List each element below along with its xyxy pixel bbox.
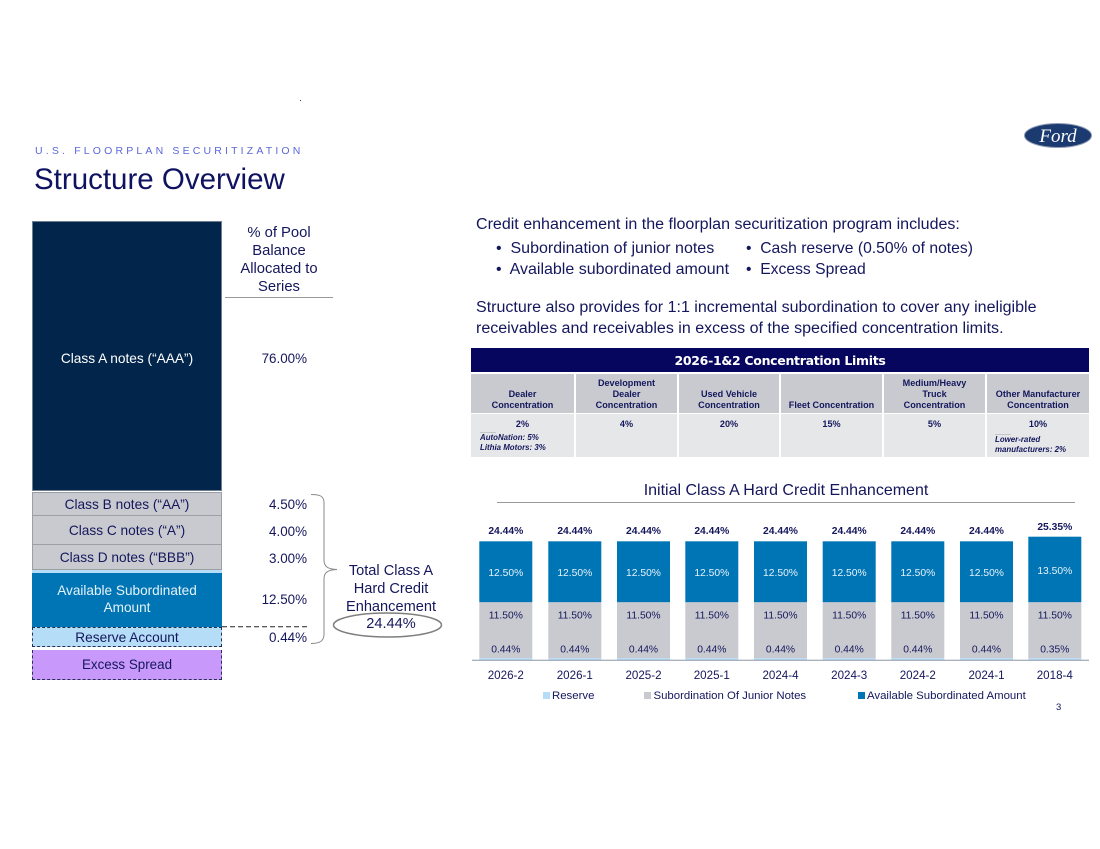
- intro sentence: Credit enhancement in the floorplan securitization program includes:: [476, 215, 960, 233]
- bar 2018-4: 0.35%: [1040, 644, 1069, 656]
- structure paragraph: [476, 298, 1037, 337]
- column: Dealer: Dealer: [509, 389, 536, 399]
- bar 2018-4: 25.35%: [1037, 522, 1072, 533]
- column: Development Dealer: Concentration: [596, 400, 657, 410]
- bar 2024-3: 12.50%: [832, 568, 867, 579]
- bar 2024-1: 24.44%: [969, 526, 1004, 537]
- Class D notes block: Class D notes (“BBB”): [60, 550, 194, 565]
- bar 2026-1: [548, 526, 601, 682]
- bar 2024-4: 2024-4: [762, 669, 799, 682]
- bar 2024-2: 2024-2: [900, 669, 936, 682]
- total credit enhancement label: 24.44%: [366, 616, 416, 632]
- column: Used Vehicle: Concentration: [698, 400, 760, 410]
- bar 2025-2: 2025-2: [625, 669, 662, 682]
- Available Subordinated Amount block: Amount: [104, 600, 150, 615]
- icon: Ford logo: Ford: [1038, 126, 1077, 147]
- column: Used Vehicle: 20%: [720, 419, 738, 429]
- manufacturer footnote: [995, 434, 1066, 454]
- Excess Spread block: Excess Spread: [82, 657, 172, 672]
- bar 2025-1: 24.44%: [694, 526, 729, 537]
- bar 2026-1: 12.50%: [557, 568, 592, 579]
- chart legend: Reserve: [552, 690, 594, 702]
- percent column heading: [240, 225, 318, 295]
- column: Medium/Heavy Truck: Concentration: [904, 400, 965, 410]
- column: Dealer: [471, 374, 574, 457]
- percent values: [262, 351, 307, 645]
- eyebrow heading: U.S. FLOORPLAN SECURITIZATION: [35, 145, 304, 157]
- column: Development Dealer: 4%: [620, 419, 633, 429]
- bar 2024-4: 12.50%: [763, 568, 798, 579]
- percent column heading: % of Pool: [247, 225, 311, 241]
- bar 2024-4: 24.44%: [763, 526, 798, 537]
- bar 2025-2: 24.44%: [626, 526, 661, 537]
- dealer footnote: Lithia Motors: 3%: [480, 443, 546, 452]
- Class C notes block: [32, 516, 222, 545]
- bar 2018-4: [1028, 522, 1081, 682]
- column: Used Vehicle: [679, 374, 779, 457]
- bullet: cash reserve: • Cash reserve (0.50% of notes): [746, 240, 973, 257]
- bar 2026-2: 12.50%: [488, 568, 523, 579]
- structure paragraph: Structure also provides for 1:1 incremental subordination to cover any ineligible: [476, 298, 1037, 316]
- column: Other Manufacturer: Concentration: [1007, 400, 1069, 410]
- bar 2025-2: 11.50%: [626, 610, 661, 622]
- bullet: excess spread: • Excess Spread: [746, 261, 866, 278]
- column: Other Manufacturer: Other Manufacturer: [996, 389, 1080, 399]
- bar 2026-2: 11.50%: [489, 610, 523, 622]
- bar 2025-1: 2025-1: [694, 669, 730, 682]
- manufacturer footnote: manufacturers: 2%: [995, 445, 1066, 454]
- Class A notes block: Class A notes (“AAA”): [61, 351, 193, 366]
- percent column heading: Series: [258, 279, 300, 295]
- column: Medium/Heavy Truck: 5%: [928, 419, 941, 429]
- bar 2024-3: 0.44%: [835, 644, 864, 656]
- bar 2025-2: 12.50%: [626, 568, 661, 579]
- bar 2025-1: 12.50%: [694, 568, 729, 579]
- column: Medium/Heavy Truck: [884, 374, 985, 457]
- total credit enhancement label: [346, 563, 436, 632]
- bar 2024-4: 11.50%: [763, 610, 798, 622]
- bar 2026-2: 2026-2: [488, 669, 524, 682]
- bar 2018-4: 13.50%: [1037, 566, 1072, 577]
- bar 2026-2: 0.44%: [491, 644, 520, 656]
- bar 2024-2: 11.50%: [901, 610, 935, 622]
- bar 2025-1: [685, 526, 738, 682]
- bar 2024-1: 0.44%: [972, 644, 1001, 656]
- bar 2024-3: 2024-3: [831, 669, 867, 682]
- percent column rule: [225, 297, 333, 298]
- Class A percent: 76.00%: [262, 351, 307, 366]
- dealer footnote: AutoNation: 5%: [480, 433, 539, 442]
- column: Used Vehicle: Used Vehicle: [701, 389, 757, 399]
- bar 2024-2: 12.50%: [900, 568, 935, 579]
- Reserve percent: 0.44%: [269, 630, 307, 645]
- credit enhancement text block: [476, 215, 1037, 337]
- total credit enhancement label: Enhancement: [346, 599, 436, 615]
- Class B percent: 4.50%: [269, 497, 307, 512]
- bar 2024-3: [823, 526, 876, 682]
- Reserve Account block: Reserve Account: [75, 630, 179, 645]
- table title bar: [471, 348, 1089, 372]
- column: Other Manufacturer: [987, 374, 1089, 457]
- bar 2026-1: 24.44%: [557, 526, 592, 537]
- column: Dealer: 2%: [516, 419, 529, 429]
- bar 2026-1: 2026-1: [557, 669, 593, 682]
- column: Dealer: Concentration: [492, 400, 553, 410]
- bar 2024-1: [960, 526, 1013, 682]
- bar 2024-1: 12.50%: [969, 568, 1004, 579]
- column: Fleet: 15%: [822, 419, 841, 429]
- column: Other Manufacturer: 10%: [1029, 419, 1047, 429]
- chart title rule: [497, 502, 1075, 503]
- Class B notes block: Class B notes (“AA”): [65, 497, 189, 512]
- bar 2026-1: 11.50%: [558, 610, 592, 622]
- bar 2024-4: [754, 526, 807, 682]
- Excess Spread block: [32, 650, 222, 680]
- Available Subordinated Amount block: Available Subordinated: [57, 583, 197, 598]
- title: Structure Overview: [34, 163, 285, 196]
- Class A notes block: [32, 221, 222, 491]
- page number: 3: [1056, 702, 1061, 713]
- bar 2025-1: 11.50%: [695, 610, 729, 622]
- bar 2026-1: 0.44%: [560, 644, 589, 656]
- manufacturer footnote: Lower-rated: [995, 435, 1040, 444]
- bar 2026-2: 24.44%: [488, 526, 523, 537]
- bar 2024-4: 0.44%: [766, 644, 795, 656]
- chart title: Initial Class A Hard Credit Enhancement: [644, 482, 928, 499]
- chart legend: Available Subordinated Amount: [867, 690, 1027, 702]
- Class D percent: 3.00%: [269, 551, 307, 566]
- table title bar: 2026-1&2 Concentration Limits: [674, 353, 886, 368]
- Class C percent: 4.00%: [269, 524, 307, 539]
- Available Subordinated percent: 12.50%: [262, 592, 307, 607]
- bar 2024-1: 11.50%: [969, 610, 1004, 622]
- bar 2025-2: [617, 526, 670, 682]
- chart legend: Subordination Of Junior Notes: [654, 690, 806, 702]
- bullet: available subordinated: • Available subordinated amount: [496, 261, 729, 278]
- column: Development Dealer: Development: [598, 378, 655, 388]
- column: Development Dealer: Dealer: [613, 389, 640, 399]
- bar 2024-1: 2024-1: [968, 669, 1005, 682]
- column: Medium/Heavy Truck: Truck: [922, 389, 947, 399]
- bar 2026-2: [479, 526, 532, 682]
- column: Fleet: Fleet Concentration: [789, 400, 874, 410]
- bullet: subordination: • Subordination of junior notes: [496, 240, 714, 257]
- bar 2018-4: 11.50%: [1038, 610, 1072, 622]
- total credit enhancement label: Total Class A: [349, 563, 433, 579]
- dealer footnote: [480, 432, 546, 452]
- Class B notes block: [32, 492, 222, 516]
- Available Subordinated Amount block: [32, 570, 222, 627]
- panel: capital structure stack: [32, 221, 222, 680]
- bar 2025-2: 0.44%: [629, 644, 658, 656]
- total credit enhancement label: Hard Credit: [354, 581, 428, 597]
- column: Medium/Heavy Truck: Medium/Heavy: [903, 378, 966, 388]
- Class D notes block: [32, 545, 222, 570]
- column: Development Dealer: [576, 374, 677, 457]
- Class C notes block: Class C notes (“A”): [69, 523, 185, 538]
- bar 2024-3: 24.44%: [832, 526, 867, 537]
- structure paragraph: receivables and receivables in excess of the specified concentration limits.: [476, 319, 1004, 337]
- bar 2018-4: 2018-4: [1037, 669, 1073, 682]
- Reserve Account block: [32, 627, 222, 647]
- column: Fleet: [781, 374, 882, 457]
- percent column heading: Allocated to: [240, 261, 318, 277]
- bar 2024-3: 11.50%: [832, 610, 866, 622]
- bar 2024-2: [891, 526, 944, 682]
- bar 2024-2: 0.44%: [903, 644, 932, 656]
- bar 2024-2: 24.44%: [900, 526, 935, 537]
- percent column heading: Balance: [252, 243, 306, 259]
- bar 2025-1: 0.44%: [697, 644, 726, 656]
- panel: concentration limits table: [471, 348, 1089, 457]
